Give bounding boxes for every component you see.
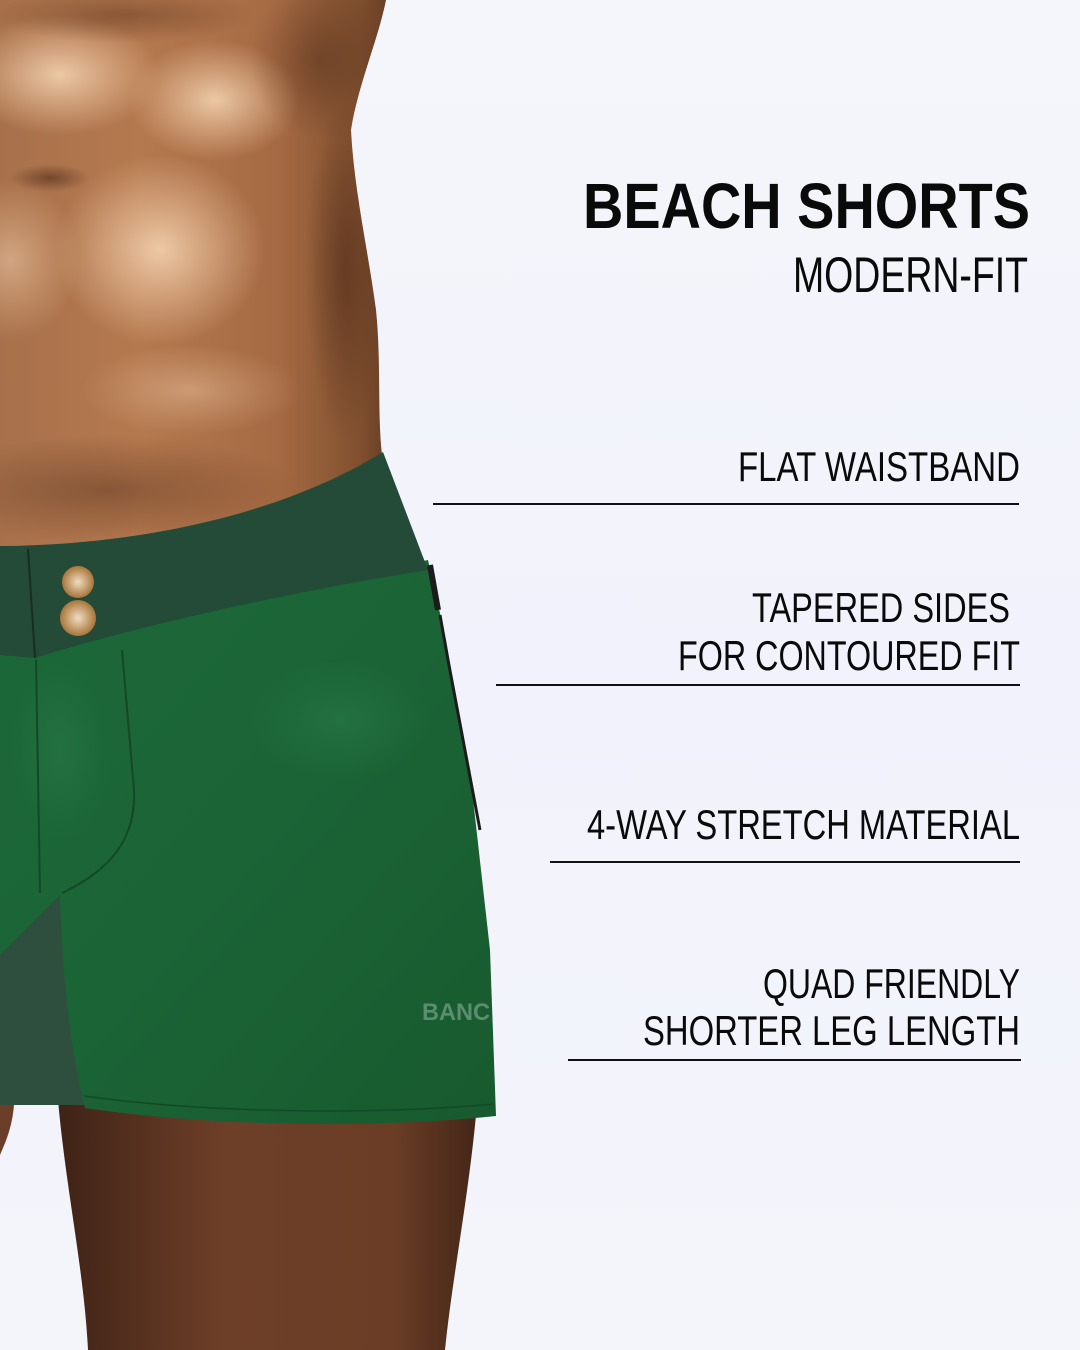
feature: leg length [568,960,1021,1061]
title: BEACH SHORTS [583,170,1030,242]
photo: model legs [0,1100,476,1350]
BANC logo: BANC [422,999,490,1026]
hem stitching [84,1096,494,1111]
feature: tapered sides [496,584,1020,686]
shorts back panel [0,890,90,1105]
side zipper [430,565,438,610]
gold buttons [60,566,96,636]
photo: model torso [0,0,400,580]
fly placket [62,650,134,893]
photo: beach shorts [0,452,496,1124]
waistband [0,452,428,658]
shorts body [0,560,496,1124]
feature: tapered sides: TAPERED SIDES [752,584,1010,631]
